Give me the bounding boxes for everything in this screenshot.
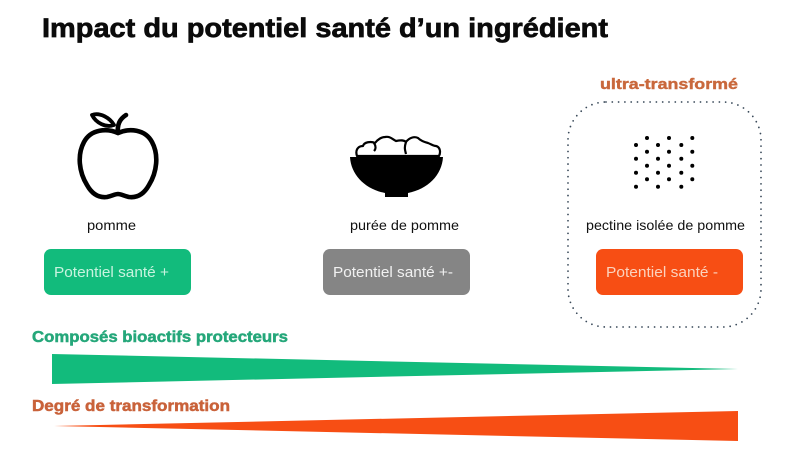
label: pomme: pomme	[87, 217, 136, 233]
badge: potentiel santé -	[596, 249, 743, 295]
icon: bowl of puree	[350, 137, 443, 197]
badge: potentiel santé +: Potentiel santé +	[54, 265, 169, 281]
label: pectine isolée de pomme: pectine isolée de pomme	[586, 217, 745, 233]
panel: ultra-transformé	[568, 76, 761, 327]
icon: pectin dots	[634, 136, 694, 189]
dotted frame	[568, 102, 761, 327]
column: purée de pomme	[323, 137, 470, 295]
column: pomme	[44, 114, 191, 295]
heading: ultra-transformé: ultra-transformé	[600, 76, 738, 93]
icon: apple	[80, 114, 156, 197]
badge: potentiel santé +-	[323, 249, 470, 295]
label: composés bioactifs protecteurs: Composés bioactifs protecteurs	[32, 329, 288, 346]
title: Impact du potentiel santé d’un ingrédient	[42, 13, 608, 43]
label: purée de pomme: purée de pomme	[350, 217, 459, 233]
label: degré de transformation: Degré de transformation	[32, 398, 230, 415]
wedge: processing degree increasing	[54, 411, 738, 441]
badge: potentiel santé +	[44, 249, 191, 295]
wedge: protective compounds decreasing	[52, 354, 738, 384]
badge: potentiel santé +-: Potentiel santé +-	[333, 265, 453, 281]
badge: potentiel santé -: Potentiel santé -	[606, 265, 718, 281]
